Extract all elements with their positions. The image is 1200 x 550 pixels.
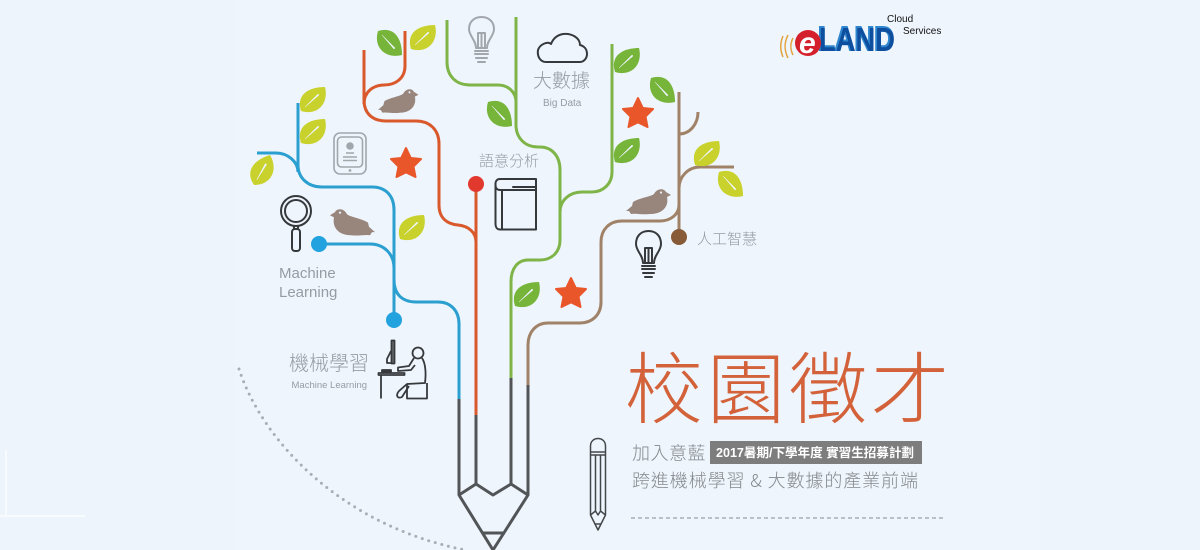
- subtitle line 2: 跨進機械學習 & 大數據的產業前端: [632, 467, 919, 493]
- label: machine learning chinese: Machine Learning: [292, 380, 367, 391]
- title: 校園徵才: [625, 328, 953, 440]
- label: semantic analysis: 語意分析: [479, 150, 539, 171]
- logo: eland cloud services: [781, 14, 941, 60]
- logo: eland cloud services: LAND: [818, 20, 894, 57]
- orange branches: [364, 31, 476, 415]
- red node: semantic analysis: [468, 176, 484, 192]
- subtitle line 1: 加入意藍: [632, 440, 706, 466]
- icon: dark bulb: [636, 231, 661, 277]
- leaves: [246, 25, 743, 307]
- birds: [330, 89, 671, 236]
- logo: eland cloud services: Cloud: [887, 14, 913, 25]
- dashed divider: [631, 517, 946, 519]
- blue node: machine learning bottom: [386, 312, 402, 328]
- label: machine learning chinese: [289, 347, 369, 391]
- label: big data: Big Data: [543, 98, 582, 109]
- logo: eland cloud services: e: [799, 27, 816, 60]
- label: machine learning: Machine: [279, 265, 336, 282]
- blue node: machine learning top: [311, 236, 327, 252]
- label: artificial intelligence: 人工智慧: [697, 228, 757, 249]
- icon: id card tablet: [334, 133, 366, 174]
- label: big data: [533, 66, 590, 109]
- icon: small pencil: [590, 438, 606, 530]
- icon: person at computer: [378, 340, 427, 398]
- icon: book: [496, 179, 536, 230]
- blue branches: [257, 103, 459, 399]
- icon: cloud: [538, 34, 587, 62]
- program badge: 2017暑期/下學年度 實習生招募計劃: [716, 445, 914, 460]
- pencil trunk: [459, 378, 528, 550]
- icon: magnifier: [281, 196, 311, 251]
- label: machine learning: Learning: [279, 284, 337, 301]
- label: big data: 大數據: [533, 66, 590, 93]
- dotted arc: [239, 369, 465, 550]
- logo: eland cloud services: LAND: [819, 21, 895, 58]
- program badge: [710, 441, 922, 464]
- icon: gray bulb: [469, 17, 494, 62]
- logo: eland cloud services: Services: [903, 26, 941, 37]
- stars: [391, 98, 653, 307]
- green branches: [447, 17, 612, 378]
- label: machine learning: [279, 265, 337, 301]
- brown node: artificial intelligence: [671, 229, 687, 245]
- brown branches: [528, 92, 734, 385]
- label: machine learning chinese: 機械學習: [289, 347, 369, 376]
